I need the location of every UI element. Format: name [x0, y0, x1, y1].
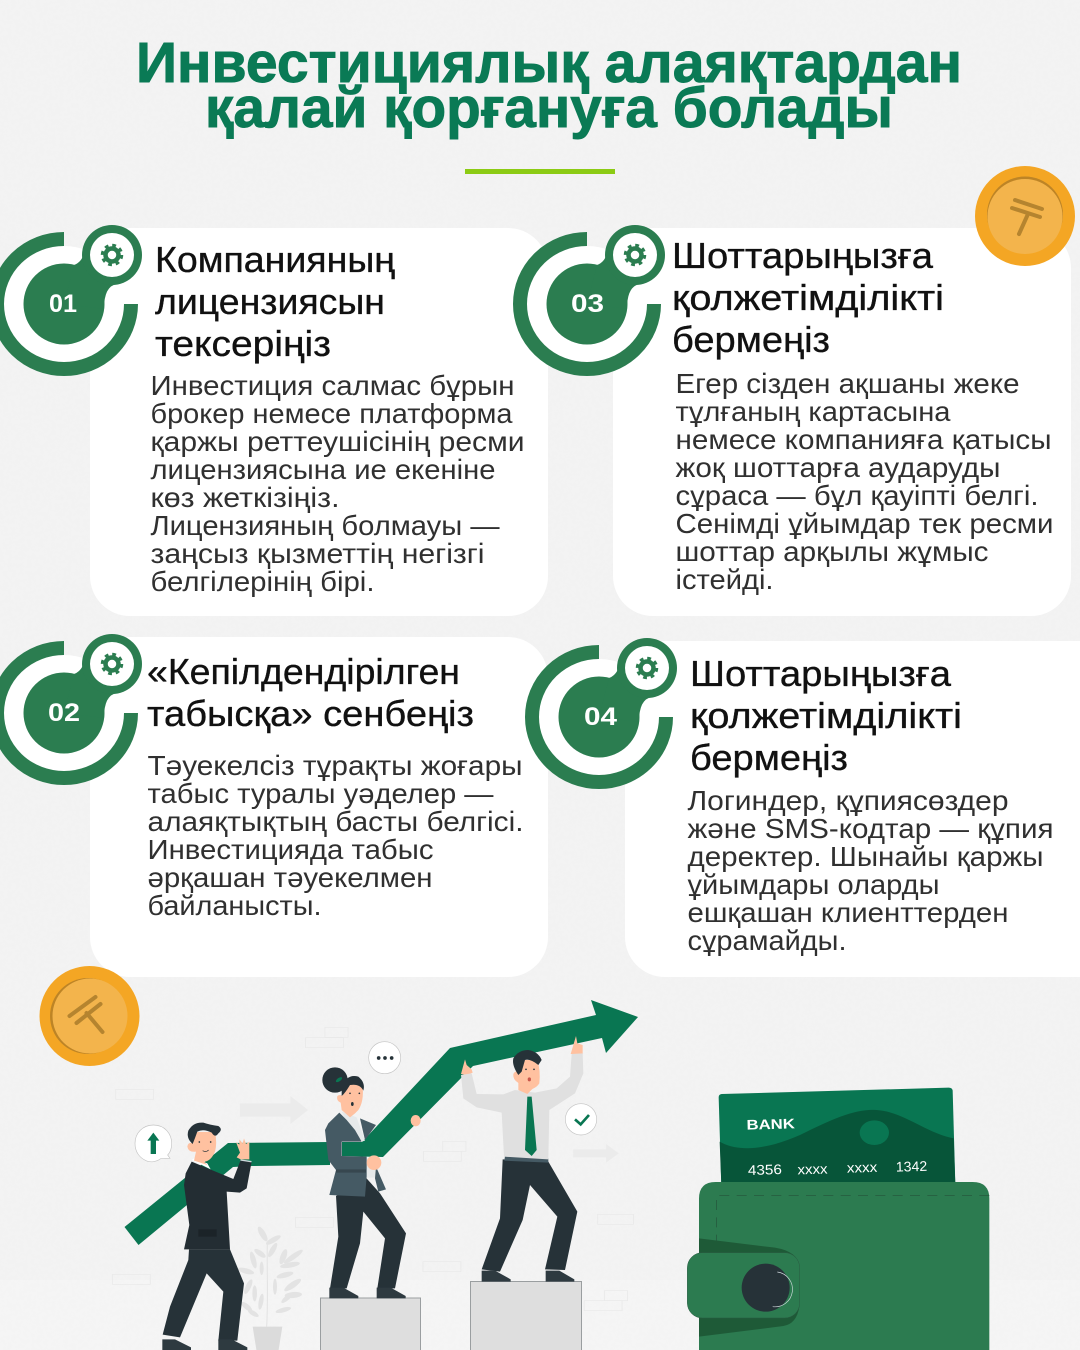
icon: badge 02: 02: [48, 699, 80, 727]
text: card 01 body: [150, 370, 524, 597]
icon: tenge coin top right: [975, 166, 1075, 266]
text: card 01 body: брокер немесе платформа: [150, 398, 513, 429]
text: card 02 body: Инвестицияда табыс: [148, 834, 434, 865]
title: Инвестициялық алаяқтардан: [136, 31, 962, 95]
text: card 03 body: сұраса — бұл қауіпті белгі.: [676, 480, 1038, 511]
heading: card 01: Компанияның: [155, 239, 395, 280]
clasp button: [742, 1264, 792, 1312]
heading: card 03: Шоттарыңызға: [672, 235, 934, 276]
text: card 02 body: [148, 750, 524, 921]
icon: badge 01: 01: [49, 290, 77, 318]
bank card: [719, 1088, 955, 1185]
text: card 04 body: [688, 785, 1054, 956]
panel: card 01: [90, 228, 548, 616]
text: card 02 body: алаяқтықтың басты белгісі.: [148, 806, 524, 837]
text: card 03 body: жоқ шоттарға аударуды: [676, 452, 1000, 483]
panel: card 03: [613, 228, 1071, 616]
wallet body: [699, 1182, 989, 1350]
text: card 04 body: ұйымдары оларды: [688, 869, 940, 900]
text: card 04 body: Логиндер, құпиясөздер: [688, 785, 1008, 816]
text: card 04 body: ешқашан клиенттерден: [688, 897, 1008, 928]
text: card 02 body: табыс туралы уәделер —: [148, 778, 494, 809]
text: card 03 body: Егер сізден ақшаны жеке: [676, 368, 1020, 399]
icon: badge 04: [532, 638, 677, 782]
title: қалай қорғануға болады: [205, 76, 893, 140]
bank card: 1342: [896, 1158, 928, 1175]
bank card: xxxx: [847, 1159, 877, 1176]
text: card 04 body: деректер. Шынайы қаржы: [688, 841, 1044, 872]
text: card 02 body: Тәуекелсіз тұрақты жоғары: [148, 750, 522, 781]
heading: card 02: [147, 651, 474, 734]
heading: card 04: [690, 653, 962, 778]
text: card 03 body: істейді.: [676, 564, 774, 595]
text: card 01 body: заңсыз қызметтің негізгі: [150, 538, 484, 569]
heading: card 04: қолжетімділікті: [690, 695, 962, 736]
speech bubble: dots: [369, 1042, 401, 1074]
pedestal right: [470, 1282, 582, 1350]
green divider: [465, 169, 615, 174]
text: card 01 body: лицензиясына ие екеніне: [150, 454, 496, 485]
text: card 02 body: әрқашан тәуекелмен: [148, 862, 432, 893]
text: card 03 body: шоттар арқылы жұмыс: [676, 536, 988, 567]
speech bubble: up arrow: [135, 1125, 172, 1162]
text: card 01 body: Инвестиция салмас бұрын: [150, 370, 514, 401]
pedestal middle: [320, 1298, 420, 1350]
heading: card 04: Шоттарыңызға: [690, 653, 952, 694]
figure: man in white shirt: [461, 1036, 583, 1282]
text: card 01 body: белгілерінің бірі.: [150, 566, 374, 597]
text: card 04 body: және SMS-кодтар — құпия: [688, 813, 1054, 844]
text: card 03 body: тұлғаның картасына: [676, 396, 951, 427]
icon: badge 01: [0, 225, 142, 369]
heading: card 01: [155, 239, 395, 364]
icon: badge 03: [520, 225, 665, 369]
heading: card 02: «Кепілдендірілген: [147, 651, 460, 692]
growth arrow lower segment: [124, 1142, 330, 1245]
icon: badge 03: 03: [571, 290, 604, 318]
text: card 03 body: немесе компанияға қатысы: [676, 424, 1052, 455]
text: card 03 body: [676, 368, 1054, 595]
heading: card 01: лицензиясын: [155, 281, 385, 322]
growth arrow upper segment: [342, 1000, 638, 1157]
faint background arrows and boxes: [112, 1027, 633, 1311]
bank card: xxxx: [797, 1160, 828, 1177]
icon: badge 02: [0, 634, 142, 778]
text: card 01 body: Лицензияның болмауы —: [150, 510, 500, 541]
text: card 01 body: қаржы реттеушісінің ресми: [150, 426, 524, 457]
heading: card 04: бермеңіз: [690, 737, 848, 778]
title: [136, 31, 962, 140]
illustration: team lifting growth arrow: [112, 1000, 638, 1350]
plant: [237, 1225, 304, 1350]
figure: woman in grey jacket: [322, 1067, 421, 1298]
heading: card 03: [672, 235, 944, 360]
text: card 04 body: сұрамайды.: [688, 925, 846, 956]
heading: card 02: табысқа» сенбеңіз: [147, 693, 474, 734]
speech bubble: check: [565, 1104, 597, 1135]
wallet clasp shadow: [699, 1238, 799, 1337]
illustration: wallet with bank card: [687, 1088, 989, 1350]
bank card: 4356: [748, 1161, 782, 1178]
text: card 01 body: көз жеткізіңіз.: [150, 482, 340, 513]
heading: card 03: қолжетімділікті: [672, 277, 944, 318]
text: card 02 body: байланысты.: [148, 890, 322, 921]
wallet clasp: [687, 1253, 800, 1318]
icon: badge 04: 04: [584, 703, 617, 731]
figure: man in black suit: [162, 1123, 252, 1350]
text: card 03 body: Сенімді ұйымдар тек ресми: [676, 508, 1054, 539]
icon: tenge coin bottom left: [40, 966, 140, 1066]
heading: card 01: тексеріңіз: [155, 323, 331, 364]
panel: card 04: [625, 641, 1080, 977]
bank card: BANK: [746, 1115, 795, 1133]
panel: card 02: [90, 637, 548, 977]
heading: card 03: бермеңіз: [672, 319, 830, 360]
